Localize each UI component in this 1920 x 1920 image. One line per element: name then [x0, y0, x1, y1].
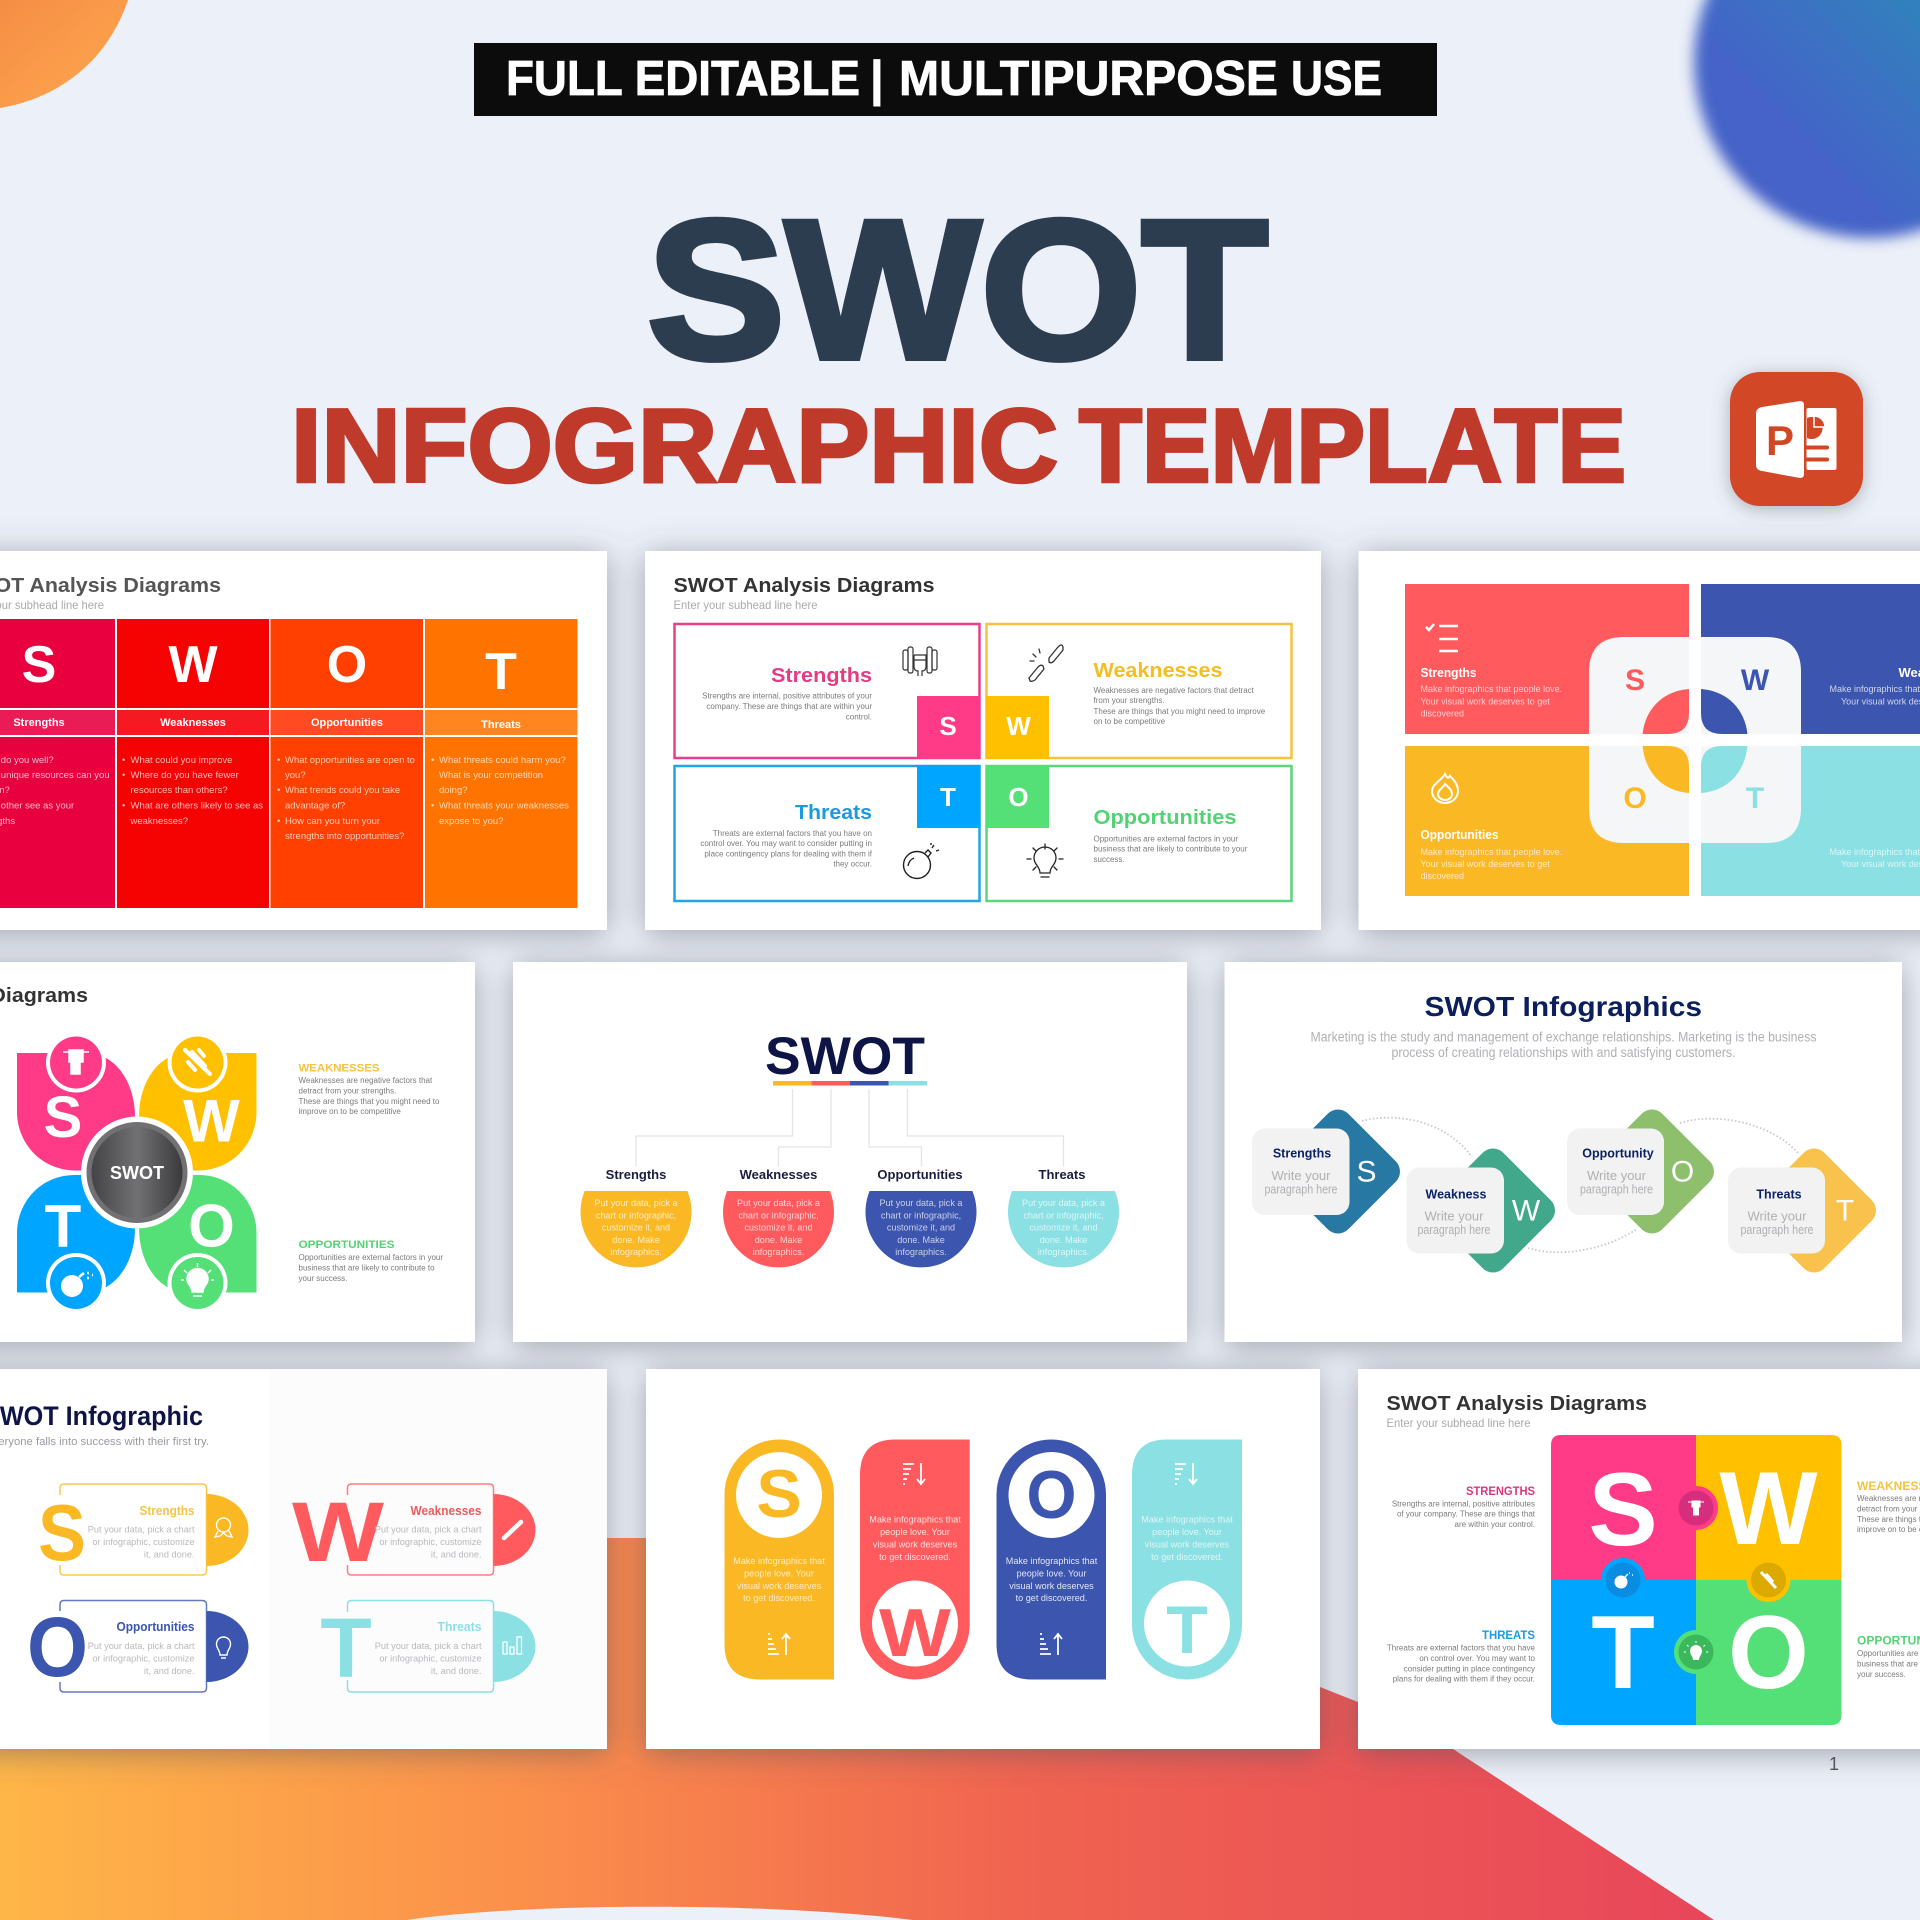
quadrant: weaknesses: on to be competitive [1094, 717, 1166, 726]
text: weaknesses: These are things that you might need to [298, 1097, 440, 1106]
column: threats: expose to you? [439, 816, 503, 827]
pill: O: Make infographics that [1006, 1556, 1098, 1566]
pill: T: to get discovered. [1151, 1552, 1223, 1562]
pill: O: O [1026, 1457, 1076, 1533]
quadrant: opportunities: success. [1094, 855, 1125, 864]
grid letters [1588, 1451, 1818, 1711]
panel: slide 6 diamond flow [1224, 962, 1902, 1342]
quadrant: strengths: Strengths [771, 665, 872, 687]
quadrant: threats: Threats [795, 802, 872, 824]
pill: W [860, 1440, 970, 1679]
column: opportunities: What opportunities are open to [285, 755, 415, 766]
icon: ascending bars arrow [1040, 1634, 1062, 1655]
column: threats: • [431, 755, 434, 766]
diamond: T: Write your [1748, 1208, 1807, 1224]
icon: descending bars arrow [903, 1463, 925, 1484]
diamond: S: paragraph here [1264, 1182, 1338, 1196]
diamond: T [1728, 1163, 1862, 1258]
pill: W: W [879, 1595, 952, 1671]
node: opportunities [865, 1167, 976, 1267]
pill: O: visual work deserves [1009, 1581, 1094, 1591]
node: threats: infographics. [1038, 1247, 1089, 1257]
column: threats [425, 619, 578, 908]
tile letters: O [1623, 782, 1647, 815]
quadrant: opportunities: business that are likely to contribute to your [1094, 845, 1248, 854]
diamond: W [1406, 1163, 1541, 1258]
node: opportunities: infographics. [895, 1247, 947, 1257]
panel: slide 2 outlined quadrants [645, 551, 1321, 930]
text: strengths: STRENGTHS [1466, 1484, 1535, 1498]
pill: W: people love. Your [880, 1527, 950, 1537]
top banner: | [870, 52, 884, 106]
text: weaknesses [1857, 1479, 1920, 1534]
node: weaknesses [723, 1167, 834, 1267]
diamond: W: Weakness [1426, 1188, 1487, 1202]
icon: flame [1432, 774, 1458, 803]
top banner: MULTIPURPOSE [899, 52, 1278, 106]
column: weaknesses: • [122, 770, 125, 781]
card: strengths: or infographic, customize [92, 1537, 194, 1547]
grid letters: T [1591, 1595, 1655, 1711]
diamond: O: Opportunity [1582, 1146, 1654, 1160]
node: threats: chart or infographic, [1023, 1210, 1104, 1220]
grid quadrants [1551, 1435, 1842, 1725]
leaves [1643, 689, 1747, 793]
text: threats: consider putting in place contingency [1404, 1664, 1535, 1674]
panel: slide 9 four-colour grid [1358, 1369, 1920, 1749]
icon: PowerPoint app [1730, 372, 1863, 506]
diamond: O [1567, 1124, 1700, 1219]
text: strengths [1392, 1484, 1536, 1529]
top banner: FULL EDITABLE [506, 52, 860, 106]
text: threats: Threats are external factors that you have [1387, 1644, 1536, 1652]
quadrant: threats: control over. You may want to consider putting in [700, 839, 872, 848]
column: strengths: Strengths [13, 717, 65, 729]
text: weaknesses: Weaknesses are negative factors that [298, 1076, 433, 1085]
node: strengths: customize it, and [602, 1222, 670, 1232]
quadrant: strengths: S [939, 711, 957, 741]
pill: O [996, 1439, 1106, 1680]
node: weaknesses: done. Make [755, 1235, 802, 1245]
pill: W: to get discovered. [879, 1552, 951, 1562]
node: threats: Put your data, pick a [1022, 1198, 1106, 1208]
panel: slide 4 petal diagram [0, 962, 475, 1342]
column: weaknesses: What could you improve [130, 755, 232, 766]
column: opportunities: What trends could you take [285, 785, 400, 796]
panel: slide 8 pill cards [646, 1369, 1320, 1749]
quadrant: strengths: company. These are things that are within your [706, 702, 872, 711]
text: opportunities [1857, 1634, 1920, 1679]
column: opportunities: advantage of? [285, 800, 345, 812]
node: strengths: Strengths [606, 1167, 666, 1182]
text: opportunities: Your visual work deserves to get [1420, 859, 1550, 869]
card: weaknesses: or infographic, customize [379, 1537, 482, 1547]
icon: link [504, 1522, 521, 1538]
column: threats: doing? [439, 785, 468, 796]
diamond: S: Strengths [1273, 1146, 1331, 1160]
petal letters [44, 1085, 240, 1260]
card: threats [320, 1600, 536, 1695]
icon: checklist [1426, 624, 1458, 651]
knob: fist [1678, 1486, 1718, 1530]
slide 6 intro text: Marketing is the study and management of exchange relationships. Marketing is the business [1310, 1030, 1817, 1044]
grid letters: S [1588, 1452, 1658, 1568]
icon: bulb [216, 1637, 230, 1658]
card: threats: T [320, 1601, 372, 1695]
card: opportunities: O [27, 1600, 88, 1694]
text: strengths: Strengths are internal, positive attributes [1392, 1500, 1535, 1508]
card: weaknesses: W [292, 1485, 385, 1579]
column: opportunities [270, 619, 423, 908]
card: strengths: it, and done. [144, 1550, 194, 1560]
card: strengths: Strengths [140, 1503, 194, 1518]
node: opportunities: customize it, and [887, 1222, 955, 1232]
card: opportunities [27, 1600, 249, 1694]
node: threats: customize it, and [1029, 1222, 1098, 1232]
column: opportunities: • [277, 785, 280, 796]
icon badge: bulb [168, 1253, 228, 1313]
card: threats: or infographic, customize [379, 1654, 482, 1664]
node: weaknesses: Weaknesses [740, 1167, 817, 1182]
text: opportunities: Opportunities are external factors in your [298, 1253, 443, 1262]
node: threats: done. Make [1040, 1235, 1087, 1245]
node: strengths [580, 1167, 692, 1267]
text: strengths: of your company. These are things that [1397, 1510, 1536, 1518]
quadrant: weaknesses: These are things that you might need to improve [1094, 707, 1266, 716]
card: threats: Threats [438, 1619, 482, 1634]
diamond: W: Write your [1424, 1208, 1484, 1224]
column: strengths [0, 619, 115, 908]
panel: slide 3 colored quadrants with leaves [1358, 551, 1920, 930]
text: threats: on control over. You may want to [1419, 1654, 1536, 1663]
text: weaknesses [298, 1062, 440, 1116]
quadrant: weaknesses: W [1006, 711, 1031, 741]
column: weaknesses: Where do you have fewer [130, 770, 239, 781]
connector lines [636, 1089, 1064, 1166]
icon badge: fist [46, 1032, 106, 1092]
text: opportunities: your success. [298, 1274, 347, 1283]
decorative blue blurred circle top-right [1694, 0, 1920, 238]
text: opportunities: discovered [1420, 871, 1464, 881]
node: strengths: infographics. [610, 1247, 662, 1257]
title: SWOT: SWOT [647, 179, 1268, 400]
node: weaknesses: infographics. [753, 1247, 804, 1257]
slide 9 heading: SWOT Analysis Diagrams [1386, 1393, 1647, 1415]
quadrant: threats: they occur. [833, 860, 872, 869]
card: threats: Put your data, pick a chart [375, 1641, 482, 1651]
quadrant: opportunities [986, 765, 1292, 901]
subtitle: infographic template: TEMPLATE [1079, 388, 1626, 504]
pill: W: Make infographics that [869, 1514, 961, 1524]
text: threats: THREATS [1482, 1628, 1535, 1642]
knob: chain [1746, 1562, 1790, 1602]
text: opportunities: OPPORTUNITIES [298, 1239, 394, 1251]
petals [17, 1053, 256, 1292]
quadrant: strengths: Strengths are internal, positive attributes of your [702, 692, 872, 701]
pill: T: people love. Your [1152, 1527, 1222, 1537]
card: opportunities: Put your data, pick a chart [88, 1641, 195, 1651]
slide 9 subhead: Enter your subhead line here [1386, 1416, 1531, 1430]
node: weaknesses: customize it, and [744, 1222, 813, 1232]
column: weaknesses: resources than others? [130, 785, 228, 796]
column: weaknesses [117, 619, 269, 908]
column: opportunities: you? [285, 770, 306, 781]
column: strengths: S [22, 636, 56, 694]
pill: T: Make infographics that [1141, 1514, 1233, 1524]
icon: fist with dumbbell [903, 647, 937, 676]
dotted connectors [1362, 1118, 1798, 1252]
text: opportunities: Opportunities [1420, 827, 1498, 842]
knob: bulb [1674, 1630, 1714, 1674]
text: opportunities: Make infographics that people love. [1420, 847, 1562, 857]
centre badge [81, 1116, 193, 1228]
quadrant: weaknesses [986, 624, 1292, 759]
slide 6 intro text: process of creating relationships with and satisfying customers. [1392, 1045, 1736, 1060]
text: weaknesses: WEAKNESSES [298, 1062, 380, 1074]
top banner [474, 43, 1437, 116]
card: weaknesses: Weaknesses [410, 1503, 482, 1518]
quadrant: strengths [674, 624, 980, 759]
text: weaknesses [1830, 665, 1920, 706]
pill: S: S [756, 1456, 802, 1532]
tile letters: W [1741, 664, 1770, 697]
subtitle: infographic template: INFOGRAPHIC [291, 388, 1058, 504]
quadrant: opportunities: Opportunities [1094, 807, 1236, 829]
page number: 1 [1829, 1754, 1839, 1774]
icon: award [215, 1518, 232, 1537]
node: strengths: done. Make [612, 1235, 660, 1245]
slide 6 heading: SWOT Infographics [1424, 991, 1702, 1022]
bottom gradient wave [0, 1538, 1714, 1920]
icon: descending bars arrow [1175, 1463, 1197, 1484]
text: opportunities: business that are likely to contribute to [298, 1264, 435, 1272]
node: strengths: Put your data, pick a [595, 1198, 678, 1208]
column: weaknesses: • [122, 755, 125, 766]
colour bar [773, 1081, 927, 1086]
card: strengths [38, 1484, 249, 1577]
text: strengths [1420, 665, 1562, 718]
subtitle: infographic template [291, 388, 1626, 504]
pill: T [1132, 1440, 1242, 1680]
node: weaknesses: Put your data, pick a [737, 1198, 821, 1208]
node: opportunities: done. Make [897, 1235, 945, 1245]
grid letters: O [1728, 1595, 1809, 1711]
pill: T: visual work deserves [1145, 1540, 1230, 1550]
column: threats: What is your competition [439, 770, 543, 781]
text: strengths: Make infographics that people love. [1420, 684, 1562, 694]
quadrant: weaknesses: Weaknesses are negative factors that detract [1094, 686, 1255, 695]
column: threats: T [485, 643, 517, 701]
column: weaknesses: weaknesses? [130, 816, 188, 827]
text: opportunities: your success. [1857, 1670, 1906, 1679]
column: opportunities: How can you turn your [285, 816, 380, 827]
column: threats: • [431, 800, 434, 812]
diamond: O: Write your [1587, 1168, 1647, 1183]
quadrant: threats: Threats are external factors that you have on [713, 829, 872, 838]
card: strengths: S [38, 1488, 86, 1577]
column: weaknesses: • [122, 800, 125, 812]
panel: slide 1 column table [0, 551, 607, 930]
icon: light bulb [1027, 844, 1063, 877]
card: opportunities: Opportunities [116, 1619, 194, 1634]
card: weaknesses: Put your data, pick a chart [375, 1524, 482, 1534]
column: opportunities: O [327, 636, 367, 694]
diamond: S [1252, 1124, 1386, 1219]
petal letters: O [188, 1192, 235, 1260]
text: opportunities [1420, 827, 1562, 881]
pill: S: people love. Your [744, 1568, 814, 1578]
node: opportunities: Put your data, pick a [880, 1198, 963, 1208]
slide 2 subhead: Enter your subhead line here [674, 598, 818, 612]
pill: S: to get discovered. [743, 1593, 815, 1603]
node: opportunities: Opportunities [877, 1167, 963, 1182]
column: threats: What threats could harm you? [439, 755, 566, 766]
diamond: T: T [1836, 1194, 1854, 1228]
petal letters: T [45, 1193, 81, 1260]
quadrant: opportunities: Opportunities are external factors in your [1094, 835, 1238, 844]
panel: slide 5 org chart [513, 962, 1187, 1342]
text: weaknesses: detract from your strengths. [298, 1086, 396, 1096]
quadrant: threats: T [940, 782, 956, 812]
slide shadows [0, 551, 1920, 1749]
text: strengths: are within your control. [1455, 1520, 1535, 1529]
text: threats: plans for dealing with them if they occur. [1393, 1674, 1535, 1684]
tile letters: S [1625, 664, 1645, 697]
text: threats [1387, 1628, 1536, 1684]
column: opportunities: • [277, 755, 280, 766]
column: weaknesses: Weaknesses [160, 717, 226, 729]
text: weaknesses: improve on to be competitive [298, 1107, 401, 1116]
node: weaknesses: chart or infographic, [738, 1210, 819, 1220]
card: weaknesses [292, 1484, 536, 1579]
petal letters: S [44, 1085, 82, 1150]
quadrant blocks [1405, 584, 1920, 896]
tile letters: T [1746, 782, 1764, 815]
tile letters [1623, 664, 1770, 815]
column: opportunities: strengths into opportunities? [285, 831, 404, 842]
pill: S [724, 1439, 834, 1680]
panel: slide 7 outlined cards [0, 1369, 607, 1749]
knob: bomb [1601, 1558, 1645, 1598]
icon: broken chain [1029, 645, 1063, 681]
icon: bar chart [503, 1637, 522, 1654]
diamond: S: Write your [1272, 1168, 1331, 1183]
top banner: USE [1291, 52, 1382, 106]
diamond: W: paragraph here [1418, 1222, 1490, 1237]
pill: T: T [1166, 1592, 1208, 1668]
diamond: T: Threats [1756, 1188, 1802, 1202]
column: opportunities: Opportunities [311, 717, 383, 729]
grid letters: W [1719, 1451, 1818, 1567]
card: opportunities: or infographic, customize [92, 1654, 194, 1664]
text: strengths: Strengths [1420, 665, 1476, 680]
quadrant: weaknesses: Weaknesses [1094, 660, 1222, 682]
card: weaknesses: it, and done. [431, 1550, 482, 1560]
column: weaknesses: W [168, 636, 218, 694]
node: opportunities: chart or infographic, [881, 1210, 961, 1220]
quadrant: threats [674, 765, 980, 901]
decorative orange circle top-left [0, 0, 128, 108]
diamond: W: W [1512, 1194, 1541, 1228]
node: threats [1008, 1167, 1119, 1267]
pill: S: Make infographics that [733, 1556, 825, 1566]
column: opportunities: • [277, 816, 280, 827]
node: threats: Threats [1039, 1167, 1085, 1182]
card: strengths: Put your data, pick a chart [88, 1524, 195, 1534]
petal letters: W [183, 1088, 240, 1154]
column: weaknesses: What are others likely to see as [130, 800, 263, 812]
icon: bomb [904, 843, 939, 878]
quadrant: opportunities: O [1008, 782, 1029, 812]
chart title: SWOT [765, 1027, 925, 1086]
pill: O: to get discovered. [1016, 1593, 1087, 1603]
icon badge: bomb [46, 1253, 106, 1313]
quadrant: weaknesses: from your strengths. [1094, 696, 1165, 705]
icon: ascending bars arrow [768, 1634, 790, 1655]
diamond: O: O [1671, 1156, 1694, 1188]
pill: S: visual work deserves [737, 1581, 822, 1591]
column: threats: What threats your weaknesses [439, 800, 569, 812]
text: opportunities [298, 1239, 443, 1283]
slide 2 heading: SWOT Analysis Diagrams [674, 575, 934, 597]
text: strengths: Your visual work deserves to get [1420, 696, 1550, 706]
node: strengths: chart or infographic, [596, 1210, 676, 1220]
diamond: S: S [1356, 1156, 1377, 1188]
pill: O: people love. Your [1017, 1568, 1086, 1578]
card: opportunities: it, and done. [144, 1666, 194, 1676]
icon: PowerPoint app: P [1766, 417, 1794, 464]
icon badge: chain [168, 1032, 228, 1092]
quadrant: strengths: control. [846, 712, 872, 721]
diamond: T: paragraph here [1740, 1222, 1814, 1237]
card: threats: it, and done. [431, 1666, 482, 1676]
pill: W: visual work deserves [873, 1540, 958, 1550]
column: threats: Threats [481, 719, 521, 731]
text: strengths: discovered [1420, 708, 1464, 718]
centre badge: SWOT [110, 1163, 164, 1183]
central rounded tiles [1589, 637, 1801, 843]
diamond: O: paragraph here [1580, 1182, 1653, 1196]
quadrant: threats: place contingency plans for dealing with them if [704, 850, 873, 859]
